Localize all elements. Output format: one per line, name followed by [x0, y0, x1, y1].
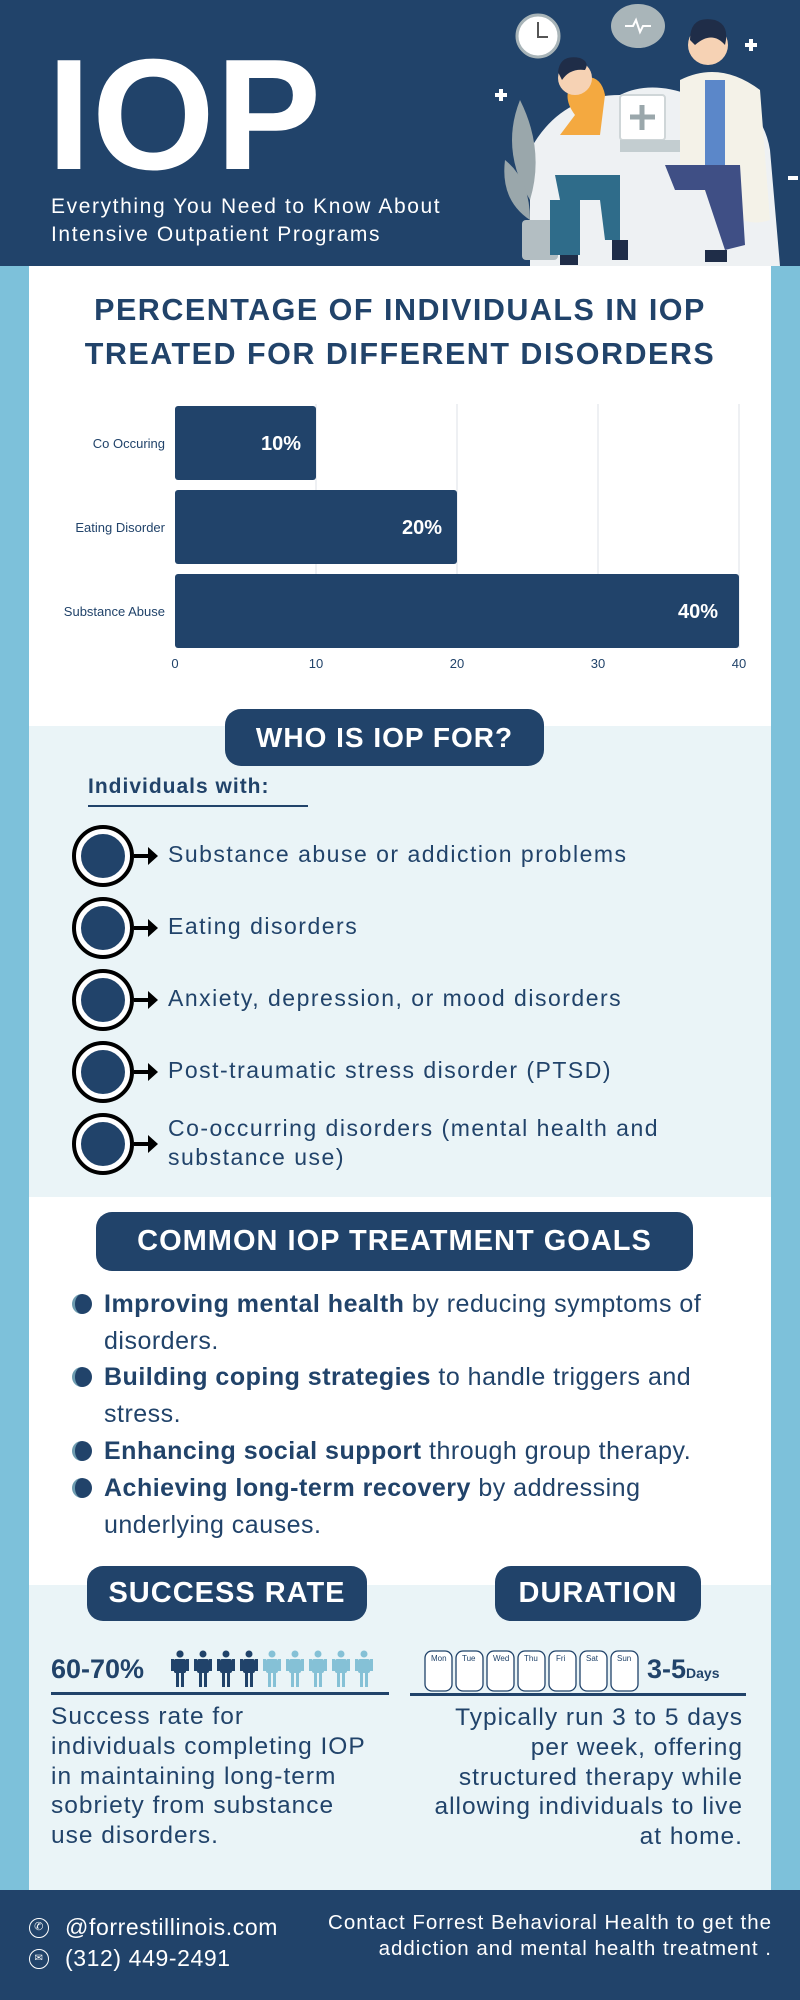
bar chart: Co Occuring: [93, 436, 165, 451]
heading: goals: COMMON IOP TREATMENT GOALS: [137, 1225, 652, 1257]
duration text: allowing individuals to live: [434, 1793, 743, 1820]
text: eating disorders: Eating disorders: [168, 913, 358, 939]
goals list: [72, 1290, 701, 1539]
success text: sobriety from substance: [51, 1792, 334, 1819]
contact info: @forrestillinois.com: [65, 1914, 278, 1940]
bar chart: 40%: [678, 601, 718, 623]
text: co-occurring: substance use): [168, 1144, 345, 1170]
icon: calendar days: Sat: [586, 1654, 599, 1663]
icon: stress: [72, 1041, 134, 1103]
goals list: Building coping strategies to handle triggers and: [104, 1363, 691, 1391]
icon: calendar days: [424, 1650, 639, 1692]
title IOP: IOP: [47, 27, 322, 203]
contact message: [328, 1911, 772, 1960]
bar chart: 20%: [402, 517, 442, 539]
chart title: TREATED FOR DIFFERENT DISORDERS: [85, 337, 715, 371]
success text: use disorders.: [51, 1822, 219, 1849]
success text: [51, 1703, 366, 1849]
heading: who is IOP for: [225, 709, 544, 766]
bar chart: 40: [732, 656, 746, 671]
bar chart: Eating Disorder: [75, 520, 166, 535]
icon: brain: [72, 969, 134, 1031]
bar chart: 10: [309, 656, 323, 671]
bar chart: Substance Abuse: [64, 604, 165, 619]
subtitle: Intensive Outpatient Programs: [51, 223, 381, 246]
icon: calendar days: Sun: [617, 1654, 631, 1663]
heading: success rate: SUCCESS RATE: [108, 1577, 346, 1609]
panel: success and duration: [29, 1585, 771, 1890]
header: [0, 0, 800, 266]
success rate stat: [51, 1650, 389, 1695]
success text: in maintaining long-term: [51, 1763, 336, 1790]
icon: calendar days: Wed: [493, 1654, 509, 1663]
heading: duration: DURATION: [519, 1577, 677, 1609]
duration stat: [410, 1650, 746, 1696]
panel: goals: [29, 1197, 771, 1585]
subheading: individuals with: Individuals with:: [88, 775, 270, 798]
heading: success rate: [87, 1566, 367, 1621]
text: anxiety: Anxiety, depression, or mood disorders: [168, 985, 622, 1011]
contact info: [29, 1914, 278, 1971]
text: substance abuse: Substance abuse or addiction problems: [168, 841, 628, 867]
goals list: Improving mental health by reducing symptoms of: [104, 1290, 701, 1318]
icon: co-occurring: [72, 1113, 134, 1175]
text: co-occurring: Co-occurring disorders (mental health and: [168, 1115, 659, 1141]
duration text: [434, 1704, 743, 1850]
subtitle: [51, 195, 441, 246]
goals list: disorders.: [104, 1327, 219, 1355]
duration text: Typically run 3 to 5 days: [455, 1704, 743, 1731]
icon: calendar days: Thu: [524, 1654, 538, 1663]
bar chart: 30: [591, 656, 605, 671]
success rate stat: 60-70%: [51, 1654, 144, 1684]
goals list: Achieving long-term recovery by addressing: [104, 1474, 640, 1502]
bar chart: 0: [171, 656, 179, 671]
contact message: addiction and mental health treatment .: [379, 1937, 772, 1960]
goals list: underlying causes.: [104, 1511, 321, 1539]
goals list: Enhancing social support through group therapy.: [104, 1437, 691, 1465]
duration text: per week, offering: [531, 1734, 743, 1761]
panel: chart: [29, 266, 771, 726]
heading: who is IOP for: WHO IS IOP FOR?: [256, 722, 513, 753]
icon: people: [171, 1650, 373, 1687]
bar chart: [64, 404, 746, 671]
bar chart: 10%: [261, 433, 301, 455]
icon: pills: [72, 825, 134, 887]
subtitle: Everything You Need to Know About: [51, 195, 441, 218]
success text: individuals completing IOP: [51, 1733, 366, 1760]
text: co-occurring: [168, 1115, 659, 1170]
contact info: ✆: [34, 1921, 44, 1933]
goals list: stress.: [104, 1400, 181, 1428]
chart title: [85, 293, 715, 371]
heading: duration: [495, 1566, 701, 1621]
icon: calendar days: Fri: [556, 1654, 566, 1663]
duration text: at home.: [640, 1823, 743, 1850]
icon: plate: [72, 897, 134, 959]
duration stat: 3-5Days: [647, 1654, 720, 1684]
panel: who is IOP for: [29, 726, 771, 1197]
duration text: structured therapy while: [459, 1764, 743, 1791]
icon: calendar days: Tue: [462, 1654, 476, 1663]
illustration: doctor and patient: [495, 4, 798, 266]
chart title: PERCENTAGE OF INDIVIDUALS IN IOP: [94, 293, 706, 327]
text: PTSD: Post-traumatic stress disorder (PTSD): [168, 1057, 612, 1083]
contact message: Contact Forrest Behavioral Health to get the: [328, 1911, 772, 1934]
contact info: (312) 449-2491: [65, 1945, 231, 1971]
contact info: ✉: [34, 1953, 43, 1964]
heading: goals: [96, 1212, 693, 1271]
bar chart: 20: [450, 656, 464, 671]
footer: [0, 1890, 800, 2000]
icon: calendar days: Mon: [431, 1654, 447, 1663]
success text: Success rate for: [51, 1703, 244, 1730]
